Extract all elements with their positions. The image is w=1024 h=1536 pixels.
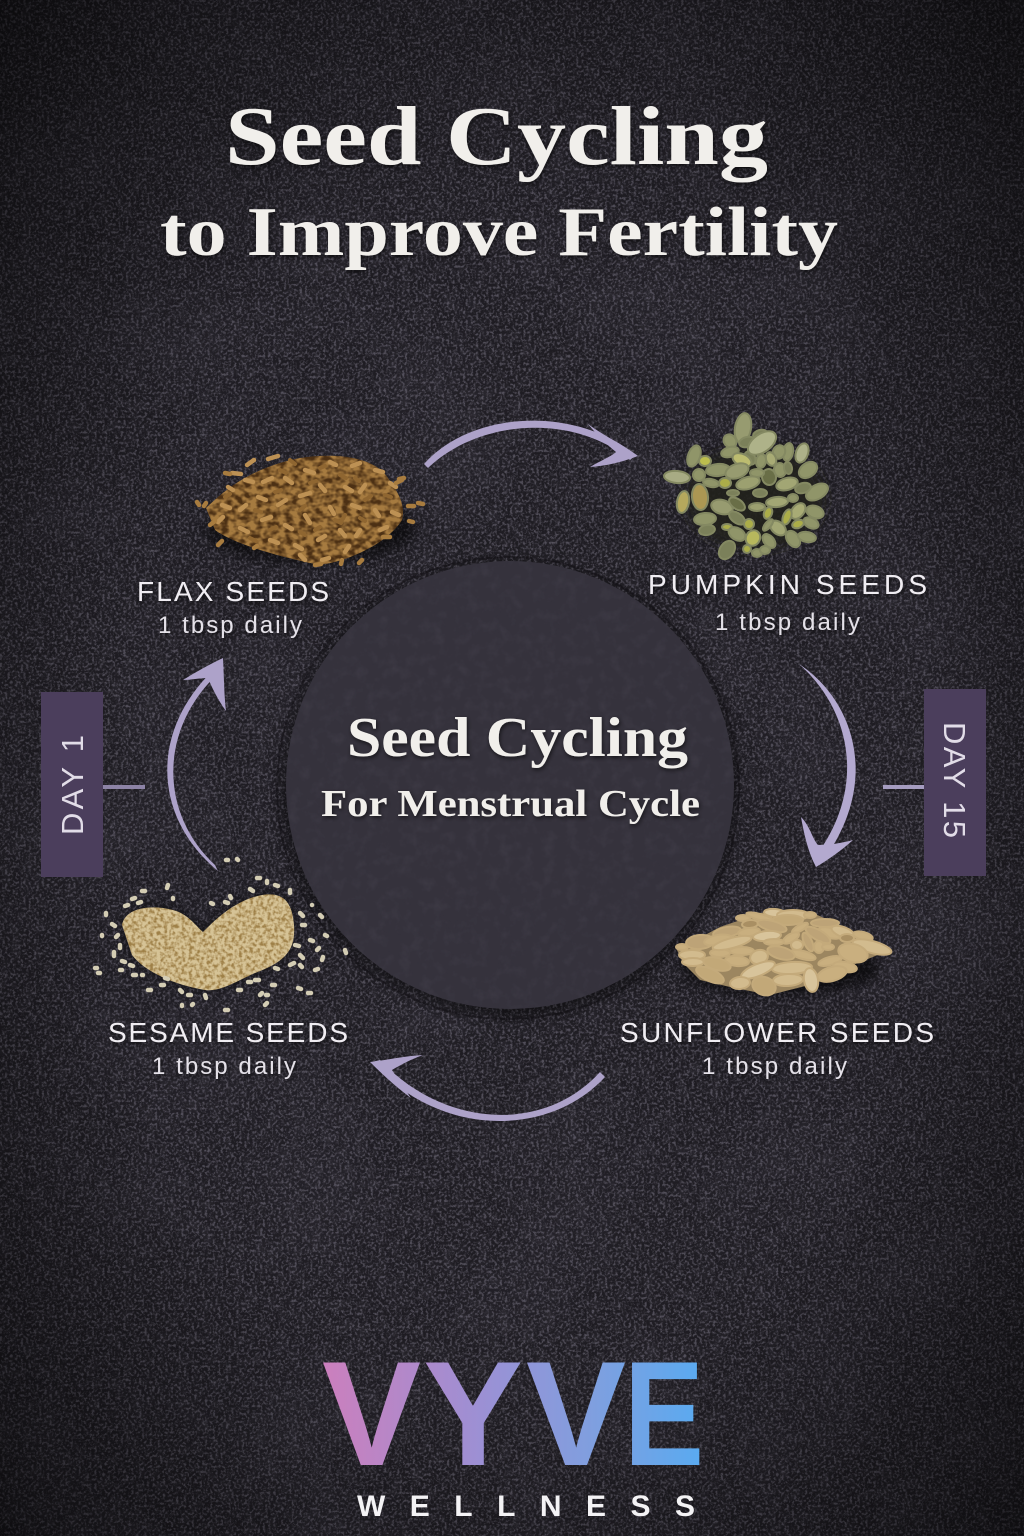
title: to Improve Fertility: [160, 194, 838, 271]
tag: day 1: [41, 692, 145, 877]
arrow: flax to pumpkin: [424, 421, 638, 468]
title: [160, 90, 838, 271]
label: flax seeds: [137, 576, 329, 639]
label: flax seeds: FLAX SEEDS: [137, 576, 329, 607]
center heading: For Menstrual Cycle: [321, 783, 700, 825]
logo: VYVE Wellness: E: [624, 1330, 704, 1497]
tag: day 1: DAY 1: [55, 735, 90, 835]
center heading: Seed Cycling: [347, 707, 688, 769]
center circle panel: [277, 557, 740, 1019]
label: sesame seeds: [108, 1017, 348, 1080]
label: pumpkin seeds: PUMPKIN SEEDS: [648, 569, 927, 600]
logo: VYVE Wellness: Y: [423, 1330, 523, 1497]
label: sesame seeds: SESAME SEEDS: [108, 1017, 348, 1048]
tag: day 15: DAY 15: [937, 722, 972, 838]
label: sunflower seeds: [620, 1017, 934, 1080]
logo: VYVE Wellness: V: [526, 1330, 626, 1497]
label: sunflower seeds: 1 tbsp daily: [702, 1053, 847, 1080]
label: pumpkin seeds: [648, 569, 927, 636]
sesame seeds pile: [95, 859, 346, 1010]
label: sesame seeds: 1 tbsp daily: [152, 1053, 296, 1080]
logo: VYVE Wellness: V: [322, 1330, 421, 1497]
arrow: sesame to flax: [167, 658, 226, 871]
logo: VYVE Wellness: WELLNESS: [357, 1490, 695, 1523]
arrow: pumpkin to sunflower: [799, 664, 856, 867]
pumpkin seeds pile: [664, 412, 831, 562]
sunflower seeds pile: [676, 908, 893, 999]
flax seeds pile: [197, 456, 423, 565]
arrow: sunflower to sesame: [370, 1055, 605, 1121]
label: pumpkin seeds: 1 tbsp daily: [715, 609, 860, 636]
label: sunflower seeds: SUNFLOWER SEEDS: [620, 1017, 934, 1048]
label: flax seeds: 1 tbsp daily: [158, 612, 302, 639]
logo: VYVE Wellness: [322, 1330, 704, 1523]
tag: day 15: [883, 689, 986, 876]
center heading: [321, 707, 700, 825]
title: Seed Cycling: [225, 90, 768, 183]
